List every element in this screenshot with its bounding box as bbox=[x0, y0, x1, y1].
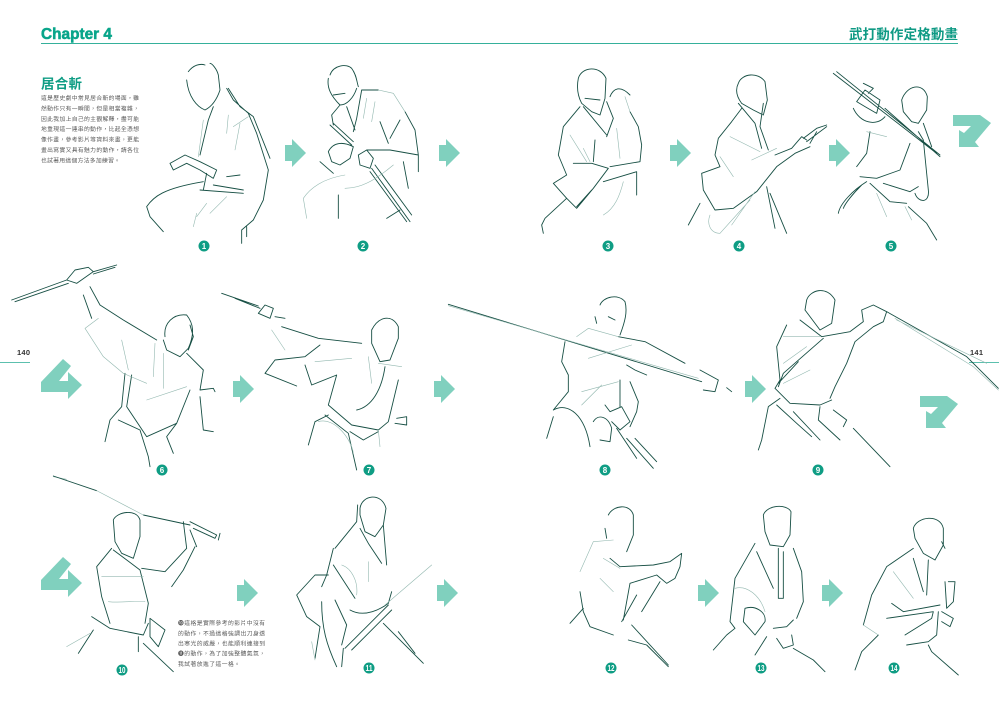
step number badges: 9 bbox=[816, 466, 821, 475]
step number badges: 13 bbox=[758, 664, 765, 673]
figure 8 bbox=[448, 297, 732, 468]
note text block: ⓫的動作，為了加強整體氣氛， bbox=[178, 650, 265, 658]
step number badges: 7 bbox=[367, 466, 372, 475]
page number 140 bbox=[0, 348, 30, 363]
figure 1 bbox=[147, 63, 270, 243]
header: chapter label: Chapter 4 bbox=[41, 26, 112, 43]
step number badges: 14 bbox=[890, 664, 898, 673]
right arrows bbox=[233, 139, 850, 607]
page number 140: 140 bbox=[17, 348, 30, 357]
figure 10 bbox=[53, 476, 220, 672]
step number badges: 2 bbox=[361, 242, 366, 251]
turn arrow: middle left bbox=[41, 359, 82, 399]
turn arrow: bottom left bbox=[41, 557, 82, 597]
figure 2 bbox=[303, 66, 418, 222]
figure 14 bbox=[855, 518, 958, 675]
intro text block: 因此我加上自己的主觀解釋，盡可能 bbox=[41, 115, 139, 123]
figure 4 bbox=[688, 75, 827, 233]
step number badges: 6 bbox=[160, 466, 165, 475]
note text block: 的動作，不過這格強調出刀身透 bbox=[178, 630, 265, 638]
note text block: 出寒光的威嚴，也能順利連接到 bbox=[178, 640, 265, 648]
figure 5 bbox=[833, 72, 940, 240]
step number badges: 11 bbox=[366, 664, 373, 673]
heading: 居合斬: 居合斬 bbox=[41, 76, 82, 92]
figure 6 bbox=[12, 265, 215, 479]
note text block: ❿這格是實際參考的影片中沒有 bbox=[178, 619, 265, 627]
intro text block: 也試著用這個方法多加練習。 bbox=[41, 156, 120, 164]
page number 141: 141 bbox=[970, 348, 983, 357]
intro text block: 這是歷史劇中常見居合斬的場面，雖 bbox=[41, 94, 139, 102]
step number badges: 8 bbox=[603, 466, 608, 475]
header: section title: 武打動作定格動畫 bbox=[849, 26, 958, 42]
step number badges bbox=[116, 240, 900, 676]
intro text block: 地重現這一連串的動作，比起全憑想 bbox=[41, 125, 139, 133]
note text block: 我試著放進了這一格。 bbox=[178, 660, 240, 668]
intro text block: 像作畫，參考影片等資料來畫，更能 bbox=[41, 136, 139, 144]
intro text block: 然動作只有一瞬間，但是相當複雜， bbox=[41, 104, 139, 112]
figure 12 bbox=[570, 507, 682, 667]
step number badges: 1 bbox=[202, 242, 207, 251]
figure 7 bbox=[222, 293, 407, 470]
step number badges: 3 bbox=[606, 242, 611, 251]
turn arrow: middle right bbox=[920, 396, 958, 428]
figure 9 bbox=[758, 291, 998, 467]
step number badges: 10 bbox=[118, 666, 126, 675]
intro text block: 畫出寫實又具有魅力的動作，請各位 bbox=[41, 146, 139, 154]
page number 141 bbox=[969, 348, 999, 363]
note text block bbox=[178, 619, 265, 668]
step number badges: 5 bbox=[889, 242, 894, 251]
figure 11 bbox=[297, 497, 432, 667]
intro text block bbox=[41, 94, 139, 164]
turn arrow: top right bbox=[953, 115, 991, 147]
step number badges: 12 bbox=[608, 664, 615, 673]
figure 13 bbox=[713, 506, 825, 672]
step number badges: 4 bbox=[737, 242, 742, 251]
figure 3 bbox=[542, 69, 642, 233]
